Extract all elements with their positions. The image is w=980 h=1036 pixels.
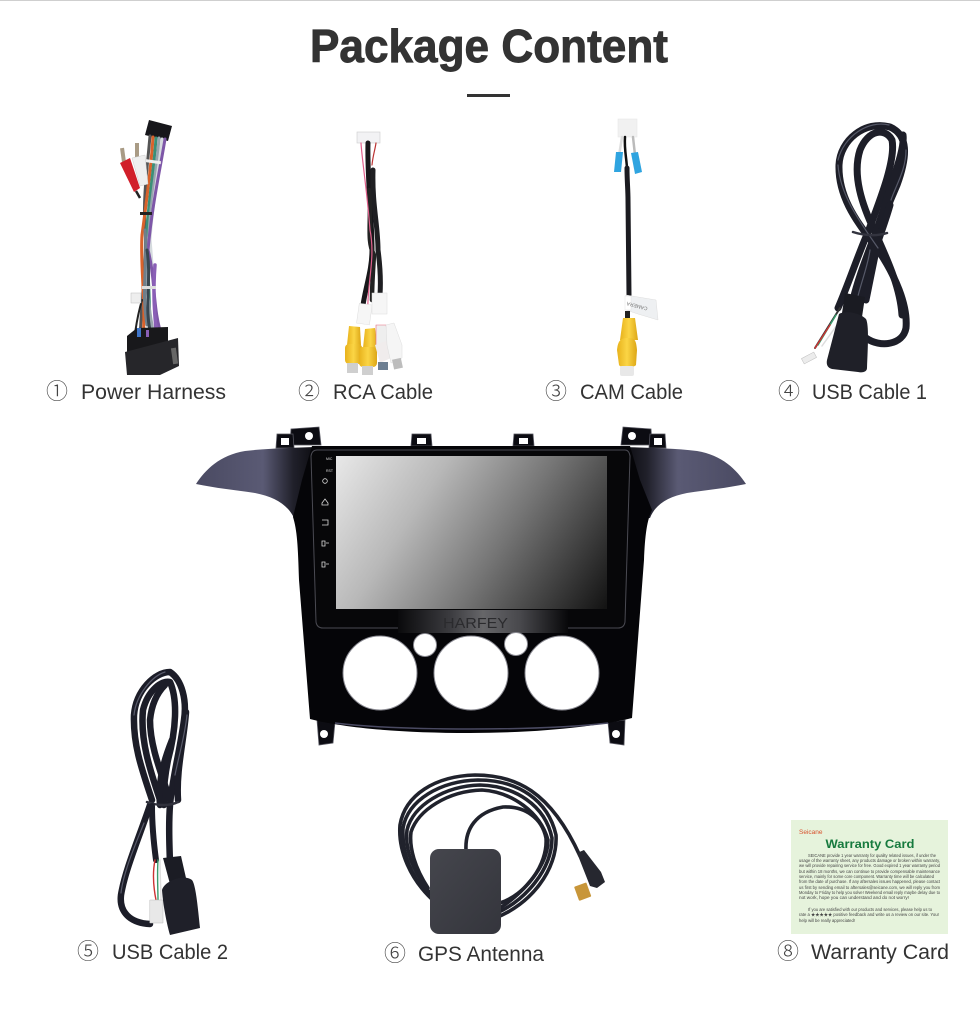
- title underline: [467, 94, 510, 97]
- icon: harness wire bundle: [133, 136, 165, 345]
- icon: harness cable ties: [131, 159, 161, 303]
- icon: usb cable highlights: [838, 124, 906, 296]
- icon: cam wires: [619, 137, 635, 295]
- item: power harness: [120, 120, 179, 375]
- side buttons: [322, 457, 334, 567]
- card body text: help will be really appreciated!: [799, 918, 855, 923]
- card body text: Monday to Friday to help you solve! Weekend email reply maybe delay due to: [799, 890, 940, 895]
- card body text: not work, hope you can understand and do not worry!: [799, 895, 909, 900]
- icon: cam tag: [625, 295, 658, 320]
- icon: cam white connector: [618, 119, 637, 137]
- title: Package Content: [310, 20, 668, 72]
- side buttons: MIC: [326, 457, 333, 461]
- reflective band: [398, 610, 568, 633]
- icon: usb cable 2 tail and wires: [150, 806, 163, 923]
- card heading: Warranty Card: [826, 837, 914, 851]
- label: power harness: Power Harness: [81, 381, 226, 404]
- label: usb cable 2: USB Cable 2: [112, 941, 228, 964]
- icon: power harness connector top: [145, 120, 172, 141]
- icon: usb tie: [853, 232, 887, 235]
- label: cam cable: ③: [545, 374, 567, 406]
- icon: cam yellow plug: [617, 311, 638, 376]
- icon: white rca plug: [132, 143, 148, 186]
- screen: [336, 456, 607, 609]
- central product: radio panel: [196, 427, 746, 745]
- icon: yellow rca plugs: [345, 326, 378, 375]
- icon: gps sma connector: [574, 850, 605, 901]
- card body text: If you are satisfied with our products and services, please help us to: [808, 907, 932, 912]
- label: power harness: ①: [46, 374, 68, 406]
- panel bottom highlight: [335, 723, 608, 729]
- label: cam cable: [545, 374, 683, 406]
- icon: rca black cables: [361, 143, 380, 320]
- icon: usb cable loops: [838, 126, 906, 344]
- icon: white rca plugs: [375, 323, 403, 370]
- icon: usb wire ends: [801, 308, 842, 364]
- label: warranty card: ⑧: [777, 934, 799, 966]
- label: rca cable: RCA Cable: [333, 381, 433, 404]
- icon: usb cable 2 tie: [147, 802, 178, 805]
- label: gps antenna: ⑥: [384, 936, 406, 968]
- side buttons: RST: [326, 469, 334, 473]
- label: warranty card: [777, 934, 949, 966]
- item: warranty card: [791, 820, 948, 934]
- card background: [791, 820, 948, 934]
- card brand: Seicane: [799, 829, 823, 836]
- icon: gps cable coils: [400, 775, 580, 918]
- card body text: us first by sending email to aftersales@seicane.com, we will reply you from: [799, 885, 940, 890]
- icon: rca white connector: [357, 132, 380, 143]
- card body text: rate a ★★★★★ positive feedback and write us a review on our site. Your: [799, 912, 939, 917]
- item: usb cable 1: [801, 124, 906, 372]
- label: power harness: [46, 374, 226, 406]
- card body text: we will provide repairing service for free. Good expired 1 year warranty period: [799, 863, 940, 868]
- icon: cam tag: CAMERA: [625, 300, 648, 311]
- label: usb cable 1: [778, 374, 927, 406]
- label: rca cable: [298, 374, 433, 406]
- icon: harness block: [125, 327, 179, 375]
- icon: usb plug: [827, 293, 868, 372]
- icon: red rca plug: [120, 148, 140, 198]
- icon: usb cable 2 loops: [121, 672, 186, 924]
- card body text: usage of the warranty sheet, any products damage or broken within warranty,: [799, 858, 940, 863]
- label: usb cable 2: [77, 934, 228, 966]
- right wing: [622, 447, 746, 520]
- card body text: but within 18 months, we can continue to provide compensable maintenance: [799, 869, 940, 874]
- label: gps antenna: GPS Antenna: [418, 943, 544, 966]
- label: cam cable: CAM Cable: [580, 381, 683, 404]
- card body text: SEICANE provide 1 year warranty for quality related issues, if under the: [808, 853, 936, 858]
- card body text: [799, 853, 941, 923]
- left wing: [196, 447, 318, 520]
- icon: rca labels: [357, 293, 387, 325]
- icon: gps antenna box: [430, 849, 501, 934]
- card body text: from the date of purchase. If any aftersales issues happened, please contact: [799, 879, 941, 884]
- bezel: [311, 450, 630, 628]
- icon: usb plug 2: [162, 856, 200, 935]
- card body text: service, mainly for some core component. Warranty time will be calculated: [799, 874, 934, 879]
- item: cam cable: [614, 119, 658, 376]
- label: warranty card: Warranty Card: [811, 941, 949, 964]
- climate control cut-outs: [343, 632, 599, 710]
- label: usb cable 2: ⑤: [77, 934, 99, 966]
- brand: HARFEY: [443, 615, 508, 632]
- label: rca cable: ②: [298, 374, 320, 406]
- panel body: [293, 446, 652, 733]
- top rule: [0, 0, 980, 1]
- item: gps antenna: [400, 775, 605, 934]
- item: usb cable 2: [121, 672, 200, 935]
- mounting tabs: [276, 427, 666, 745]
- tab holes: [281, 432, 662, 738]
- icon: cam blue terminals: [614, 152, 642, 174]
- label: gps antenna: [384, 936, 544, 968]
- icon: usb cable 2 highlights: [121, 672, 187, 893]
- item: rca cable: [345, 132, 403, 375]
- label: usb cable 1: USB Cable 1: [812, 381, 927, 404]
- label: usb cable 1: ④: [778, 374, 800, 406]
